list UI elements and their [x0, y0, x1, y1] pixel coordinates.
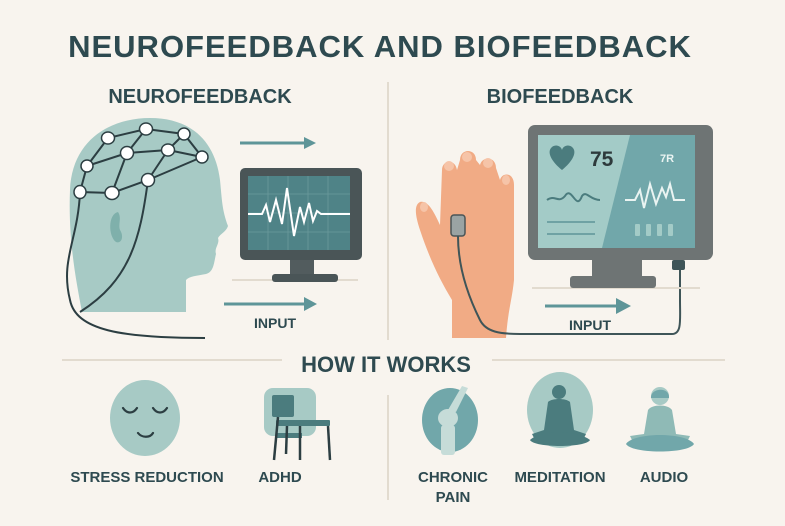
icon: head with EEG electrodes — [67, 118, 228, 338]
label: chronic pain: CHRONIC — [418, 469, 488, 486]
label: input right: INPUT — [569, 317, 611, 333]
arrow: bottom left input — [224, 297, 317, 311]
heading: biofeedback: BIOFEEDBACK — [487, 86, 634, 108]
monitor: biofeedback — [528, 125, 713, 288]
label: meditation: MEDITATION — [514, 469, 606, 486]
title: NEUROFEEDBACK AND BIOFEEDBACK — [68, 29, 692, 64]
icon: calm face — [110, 380, 180, 456]
monitor: biofeedback: 7R — [660, 153, 674, 165]
icon: chair — [264, 388, 330, 460]
label: adhd: ADHD — [258, 469, 302, 486]
label: input left: INPUT — [254, 315, 296, 331]
icon: audio figure — [626, 387, 694, 452]
arrow: bottom right input — [545, 298, 631, 314]
monitor: EEG — [232, 168, 362, 282]
label: stress reduction: STRESS REDUCTION — [70, 469, 224, 486]
heading: neurofeedback: NEUROFEEDBACK — [108, 86, 292, 108]
label: audio: AUDIO — [640, 469, 688, 486]
heading: how it works: HOW IT WORKS — [301, 352, 471, 377]
icon: knee joint — [422, 386, 478, 455]
icon: meditation — [527, 372, 593, 448]
arrow: top left — [240, 137, 316, 149]
icon: hand with finger sensor — [416, 151, 680, 338]
monitor: biofeedback: 75 — [590, 148, 614, 171]
text: PAIN — [436, 489, 470, 506]
